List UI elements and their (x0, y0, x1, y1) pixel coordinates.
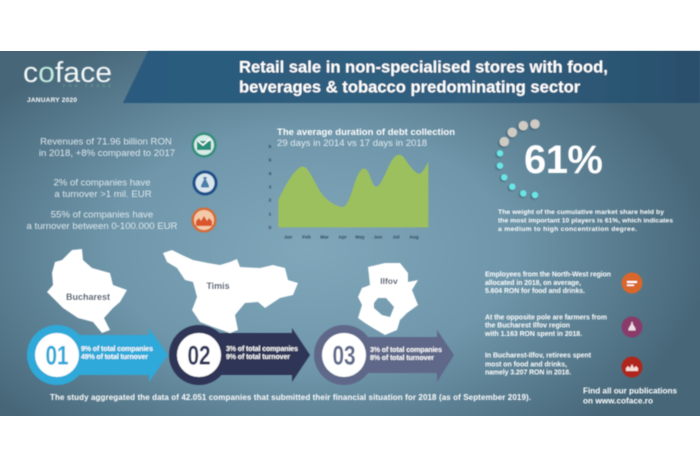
area chart: debt collection: Jan (284, 234, 292, 240)
market share caption (498, 209, 673, 233)
title: Retail sale in non-specialised stores with food, (239, 58, 608, 76)
map: Ilfov: Ilfov (380, 276, 398, 286)
arrow 02: 3% of total companies (226, 346, 298, 353)
header banner (123, 51, 700, 103)
area chart: debt collection: 0 (269, 225, 272, 231)
market share caption: The weight of the cumulative market share held by (498, 209, 664, 216)
arrow 03: 8% of total turnover (370, 355, 434, 362)
logo: coface: coface (23, 57, 112, 89)
panel: background (0, 51, 700, 416)
stat: revenues (39, 136, 175, 159)
text: Bucharest-Ilfov farmers: At the opposite pole are farmers from (485, 314, 607, 322)
market share caption: a medium to high concentration degree. (498, 226, 637, 233)
footer note: The study aggregated the data of 42.051 companies that submitted their financial situation for 2018 (as of September 2019). (50, 393, 531, 402)
map: Timis: Timis (206, 281, 230, 291)
map: Ilfov (358, 263, 418, 335)
icon: people (192, 208, 216, 232)
text: North-West employees (485, 272, 611, 295)
chart heading (277, 127, 455, 149)
arrow 01: 49% of total turnover (81, 354, 148, 361)
area chart: debt collection: Jun (374, 234, 382, 240)
text: North-West employees: 5.604 RON for food and drinks. (485, 288, 585, 295)
icon: money bag (192, 170, 218, 196)
map: Bucharest: Bucharest (66, 292, 110, 302)
area chart: debt collection: Feb (302, 234, 311, 240)
stat: turnover small (27, 210, 178, 232)
icon: revenues (192, 132, 216, 158)
area chart: debt collection (269, 144, 428, 240)
arrow 03: 3% of total companies (370, 347, 442, 354)
text: retirees: In Bucharest-Ilfov, retirees spent (485, 352, 592, 360)
area chart: debt collection: Apr (338, 234, 347, 240)
text: Bucharest-Ilfov farmers: with 1.163 RON spent in 2018. (484, 331, 582, 338)
area chart: debt collection: Jul (393, 234, 399, 240)
arrow 01: 9% of total companies (81, 346, 153, 353)
text: retirees: most on food and drinks, (485, 362, 567, 368)
icon: wallet (622, 272, 642, 294)
map: Bucharest (47, 249, 127, 333)
link: publications: Find all our publications (583, 386, 677, 396)
text: retirees: namely 3.207 RON in 2018. (485, 370, 571, 376)
chart heading: 29 days in 2014 vs 17 days in 2018 (277, 138, 427, 149)
date label: JANUARY 2020 (27, 97, 77, 104)
stat: turnover small: 55% of companies have (51, 210, 153, 220)
link: publications (583, 386, 677, 406)
arrow 02 (169, 325, 310, 385)
arrow 01 (27, 325, 168, 385)
stat: turnover over 1 mil: 2% of companies have (53, 178, 151, 188)
icon: people small (622, 356, 642, 378)
stat: turnover over 1 mil: a turnover >1 mil. EUR (54, 189, 152, 200)
market share caption: the most important 10 players is 61%, which indicates (498, 218, 673, 224)
map: Timis (163, 250, 298, 333)
area chart: debt collection: 6 (269, 144, 272, 150)
arrow 03: 03 (332, 341, 356, 371)
stat: revenues: in 2018, +8% compared to 2017 (39, 148, 175, 159)
area chart: debt collection: 3 (269, 184, 272, 190)
big number: 61%: 61% (524, 138, 603, 182)
area chart: debt collection: May (355, 234, 365, 240)
logo: coface: FOR TRADE (63, 83, 111, 88)
area chart: debt collection: Aug (409, 234, 419, 240)
area chart: debt collection: 5 (269, 158, 272, 164)
arrow 02: 9% of total turnover (226, 354, 290, 361)
area chart: debt collection: 4 (269, 171, 272, 177)
area chart: debt collection: 1 (269, 212, 272, 218)
stat: turnover over 1 mil (53, 178, 152, 200)
title: beverages & tobacco predominating sector (239, 78, 581, 96)
text: Bucharest-Ilfov farmers (484, 314, 607, 338)
text: Bucharest-Ilfov farmers: the Bucharest Ilfov region (485, 322, 570, 330)
stat: turnover small: a turnover between 0-100.000 EUR (27, 221, 178, 232)
area chart: debt collection: Mar (320, 234, 329, 240)
chart heading: The average duration of debt collection (277, 127, 455, 138)
arrow 02: 02 (188, 341, 211, 371)
text: North-West employees: allocated in 2018, on average, (485, 280, 581, 287)
link: publications: on www.coface.ro (583, 396, 653, 406)
area chart: debt collection: 2 (269, 198, 272, 204)
arrow 01: 01 (46, 341, 69, 371)
text: retirees (485, 352, 592, 376)
icon: money bag small (622, 316, 642, 338)
stat: revenues: Revenues of 71.96 billion RON (40, 136, 172, 148)
arrow 03 (314, 325, 454, 385)
percentage ring (497, 119, 540, 198)
text: North-West employees: Employees from the North-West region (485, 272, 611, 278)
title (239, 58, 608, 96)
